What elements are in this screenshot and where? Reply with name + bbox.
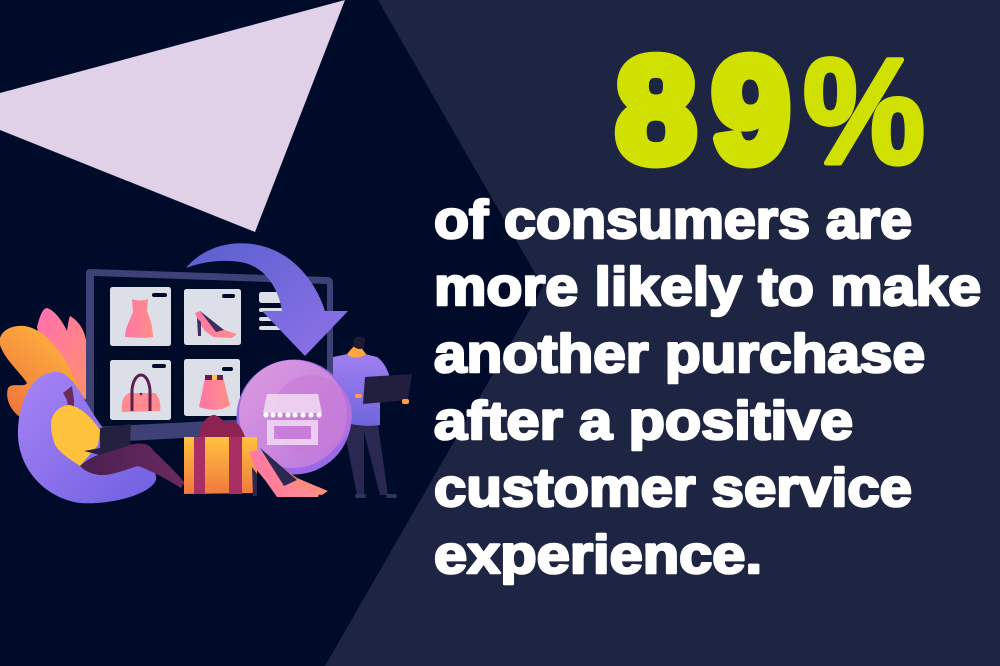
line 2: more likely to make	[434, 257, 981, 317]
gift box	[184, 415, 257, 494]
neck	[347, 346, 366, 357]
foot	[183, 473, 200, 489]
head	[63, 386, 74, 408]
trousers	[343, 423, 388, 495]
woman on beanbag	[51, 386, 200, 489]
torso	[51, 405, 100, 466]
beanbag	[18, 372, 156, 503]
line 3: another purchase	[434, 324, 925, 384]
headline: 89%	[616, 27, 925, 195]
product card: dress	[110, 287, 171, 346]
store icon	[263, 394, 322, 445]
text lines on monitor	[259, 292, 287, 330]
lighter navy panel	[325, 0, 1000, 666]
high heels	[249, 448, 328, 497]
illustration: online shopping	[0, 243, 412, 503]
product card: bag	[110, 360, 171, 420]
percent sign: %	[803, 27, 925, 195]
curved arrow	[186, 243, 348, 356]
line 5: customer service	[434, 458, 912, 518]
hands	[402, 399, 409, 404]
lilac triangle	[0, 0, 345, 232]
laptop	[84, 424, 131, 455]
head	[353, 337, 365, 349]
monitor	[86, 269, 333, 443]
man with laptop	[333, 337, 412, 498]
shirt	[333, 354, 390, 426]
body text	[434, 190, 981, 585]
product card: skirt	[184, 359, 240, 416]
store circle	[236, 360, 352, 474]
digit 8: 8	[616, 28, 696, 193]
digit 9: 9	[712, 28, 790, 193]
product card: heels	[184, 289, 241, 345]
orange leaf	[0, 326, 86, 440]
line 6: experience.	[434, 525, 762, 585]
legs	[80, 443, 184, 488]
shoes	[355, 494, 366, 498]
laptop	[363, 374, 412, 404]
pink leaf	[37, 308, 86, 400]
line 4: after a positive	[434, 391, 853, 451]
line 1: of consumers are	[434, 190, 912, 250]
